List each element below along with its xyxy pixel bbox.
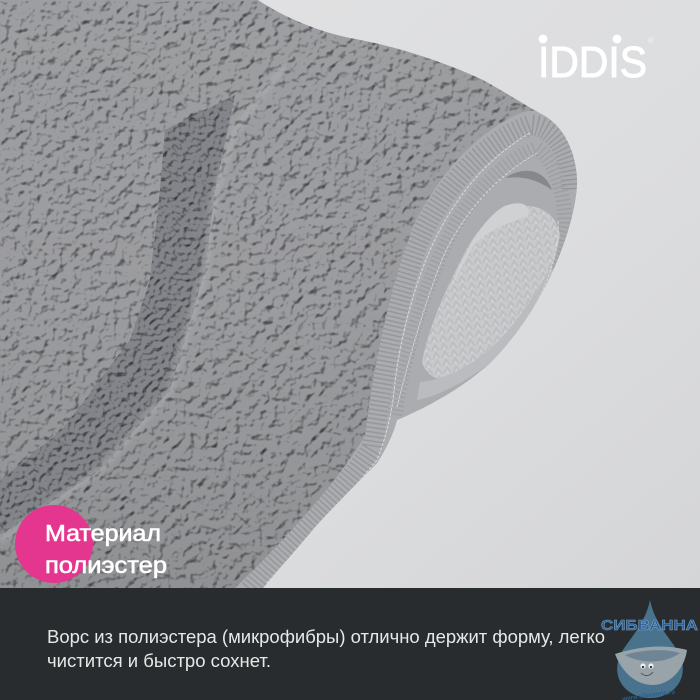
underside anti-slip pattern	[422, 206, 560, 380]
second binding ribs	[395, 148, 565, 415]
badge text: Материал	[45, 520, 161, 546]
brand logo: IDDIS: ®	[648, 36, 654, 45]
tub face	[640, 663, 654, 676]
badge: material	[15, 505, 167, 583]
stitches	[267, 133, 530, 583]
rug photo	[0, 0, 600, 590]
watermark name: СИБВАННА	[601, 617, 698, 634]
lower fold	[417, 268, 556, 400]
inner fold	[454, 203, 528, 282]
water drop	[617, 600, 683, 698]
loop strip	[0, 95, 235, 535]
first binding ribs	[250, 125, 572, 590]
rug pile	[0, 0, 600, 590]
watermark: СИБВАННА	[601, 600, 698, 700]
badge: material: полиэстер	[45, 552, 167, 578]
roll base	[233, 100, 600, 590]
caption panel	[0, 588, 700, 700]
brand logo: IDDIS: IDDIS	[538, 39, 647, 87]
bathtub	[615, 647, 687, 685]
light seam	[0, 65, 285, 540]
caption panel: чистится и быстро сохнет.	[47, 651, 271, 671]
pink circle	[15, 505, 93, 583]
caption text: Ворс из полиэстера (микрофибры) отлично держит форму, легко	[47, 627, 605, 647]
inner crease shadow	[505, 171, 552, 190]
